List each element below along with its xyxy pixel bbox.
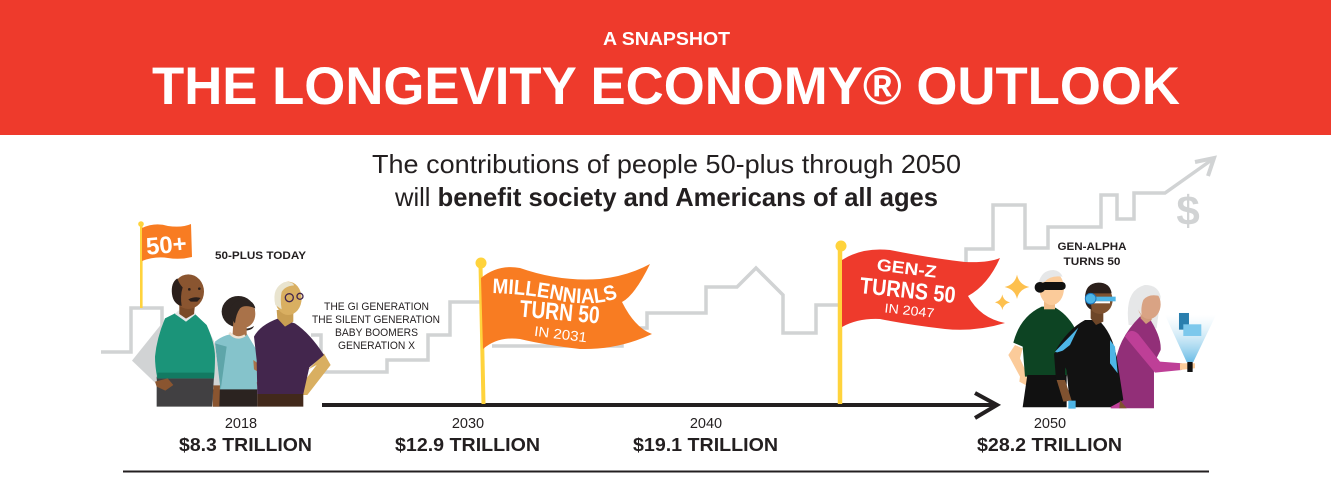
timeline label: 2050 xyxy=(977,416,1122,455)
flag: 50+ xyxy=(138,221,192,308)
list of generations: THE SILENT GENERATION xyxy=(312,314,440,326)
flag: millennials turn 50 in 2031: MILLENNIALS xyxy=(494,278,616,304)
header banner xyxy=(0,0,1331,135)
man in green vest xyxy=(132,274,220,407)
flag: gen-z turns 50 in 2047 xyxy=(836,240,1005,404)
timeline label: 2040: 2040 xyxy=(690,416,722,432)
timeline label: 2018: 2018 xyxy=(225,416,257,432)
list of generations: GENERATION X xyxy=(338,340,416,352)
man in purple polo xyxy=(254,282,331,407)
flag: millennials turn 50 in 2031: IN 2031 xyxy=(533,323,588,345)
woman with visor xyxy=(1054,283,1127,409)
woman in blue top xyxy=(213,296,274,407)
woman with purple top xyxy=(1110,285,1195,408)
timeline arrow xyxy=(322,393,997,418)
subtitle: The contributions of people 50-plus through 2050 xyxy=(372,149,961,179)
flag: gen-z turns 50 in 2047: IN 2047 xyxy=(884,300,935,321)
timeline label: 2040 xyxy=(633,416,778,455)
label: 50-plus today: 50-PLUS TODAY xyxy=(215,250,307,262)
label: gen-alpha turns 50: GEN-ALPHA xyxy=(1058,241,1127,253)
timeline label: 2030 xyxy=(395,416,540,455)
eyebrow heading: A SNAPSHOT xyxy=(603,29,730,49)
subtitle: will benefit society and Americans of all ages xyxy=(394,182,938,212)
list of generations: BABY BOOMERS xyxy=(335,327,418,339)
dollar sign icon: $ xyxy=(1176,187,1200,234)
holographic projection device xyxy=(1165,313,1216,372)
flag: gen-z turns 50 in 2047: TURNS 50 xyxy=(859,272,957,308)
flag: millennials turn 50 in 2031: TURN 50 xyxy=(519,296,601,329)
label: gen-alpha turns 50 xyxy=(1058,241,1127,268)
timeline label: 2040: $19.1 TRILLION xyxy=(633,434,778,455)
illustration: three future adults xyxy=(995,270,1216,409)
timeline label: 2018 xyxy=(179,416,312,455)
subtitle xyxy=(372,149,961,212)
timeline label: 2030: 2030 xyxy=(452,416,484,432)
list of generations xyxy=(312,301,440,352)
flag: 50+: 50+ xyxy=(145,230,188,261)
list of generations: THE GI GENERATION xyxy=(324,301,429,313)
flag: millennials turn 50 in 2031 xyxy=(476,258,652,404)
timeline label: 2050: $28.2 TRILLION xyxy=(977,434,1122,455)
flag: gen-z turns 50 in 2047: GEN-Z xyxy=(876,255,938,282)
timeline label: 2018: $8.3 TRILLION xyxy=(179,434,312,455)
timeline label: 2030: $12.9 TRILLION xyxy=(395,434,540,455)
illustration: three older adults xyxy=(132,274,331,407)
title: THE LONGEVITY ECONOMY® OUTLOOK xyxy=(152,57,1180,116)
man with green top xyxy=(1008,270,1078,407)
timeline label: 2050: 2050 xyxy=(1034,416,1066,432)
rising skyline line xyxy=(101,158,1214,372)
label: gen-alpha turns 50: TURNS 50 xyxy=(1064,256,1120,268)
sparkles xyxy=(995,275,1029,310)
